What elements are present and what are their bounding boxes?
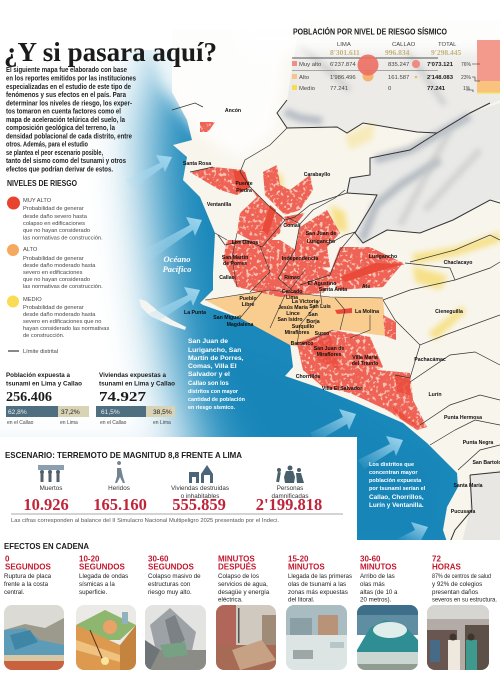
column: 0 seconds: central. (4, 589, 25, 596)
intro text: efectos que podrían derivar de estos. (6, 166, 113, 173)
stat: homes exposed to tsunami: 38,5% (153, 409, 172, 416)
map: district labels: del Triunfo (352, 361, 378, 367)
map: district labels: Ventanilla (207, 202, 231, 208)
row: medio (292, 85, 471, 92)
map: district labels: Cercado (282, 289, 302, 295)
legend: alto: que no hayan considerado (23, 277, 90, 283)
row: medio: 0 (388, 86, 392, 92)
label: Océano Pacífico: Pacífico (163, 264, 191, 274)
column: 10-20 seconds: sísmicas a la (79, 581, 115, 588)
stat: injured: 165.160 (93, 495, 147, 514)
legend: medio: desde daño moderado hasta (23, 312, 96, 318)
callout: districts with most population at risk: Callao son los (188, 381, 229, 387)
column: 72 hours: 87% de centros de salud (432, 573, 491, 580)
map: district labels: Independencia (282, 256, 318, 262)
stat: injured (93, 461, 147, 514)
map: district labels: San Isidro (277, 317, 303, 323)
stat: injured: Heridos (108, 485, 130, 492)
row: medio: 1% (463, 86, 471, 92)
map: district labels: Jesús María (278, 305, 308, 311)
map: district labels: Los Olivos (232, 240, 258, 246)
stat: people affected: damnificadas (271, 493, 309, 500)
map: land (172, 30, 500, 542)
intro text: composición geológica del terreno, la (6, 125, 115, 132)
map: district labels: Lima (286, 295, 298, 301)
intro text: tanto del sismo como del tsunami y otros (6, 158, 126, 165)
callout: districts most exposed to tsunami (369, 462, 426, 509)
column: 10-20 seconds: SEGUNDOS (79, 562, 125, 572)
callout: districts with most population at risk: cantidad de población (188, 397, 245, 403)
column: 30-60 seconds: riesgo muy alto. (148, 589, 192, 596)
map: district labels: Piedra (236, 188, 252, 194)
map: sea and coast (0, 0, 500, 542)
column: 15-20 minutes: olas de tsunami a las (288, 581, 346, 588)
callout: districts most exposed to tsunami: población expuesta (369, 478, 422, 484)
map: northern land fade (130, 0, 300, 160)
stacked bar (466, 40, 500, 94)
column: minutes after: eléctrica. (218, 596, 243, 604)
column: 30-60 minutes: 20 metros). (360, 596, 392, 604)
map: district labels: Rímac (284, 275, 300, 281)
callout: districts with most population at risk: Lurigancho, San (188, 347, 241, 354)
stat: homes exposed to tsunami: tsunami en Lima y Callao (99, 380, 175, 388)
column: 30-60 seconds: estructuras con (148, 581, 191, 588)
row: muy alto: 76% (461, 62, 472, 68)
legend: medio: MEDIO (23, 297, 42, 303)
column: 72 hours: 72 (432, 554, 441, 564)
legend: muy alto (7, 196, 103, 242)
intro text: en los reportes emitidos por las instituciones (6, 76, 136, 82)
map: district labels: San Juan de (306, 231, 336, 237)
callout: districts with most population at risk: Salvador y el (188, 371, 230, 378)
callout: districts most exposed to tsunami: Los distritos que (369, 462, 414, 468)
column: 10-20 seconds: superficie. (79, 589, 107, 596)
column: 30-60 seconds: SEGUNDOS (148, 562, 194, 572)
population table: 8'301.611 (330, 48, 360, 57)
column: 30-60 minutes: olas más (360, 581, 385, 588)
map: district labels: de Porres (223, 261, 247, 267)
legend: medio: Probabilidad de generar (23, 305, 84, 311)
intro text: determinar los niveles de riesgo, los exper- (6, 100, 133, 107)
map: district labels: El Agustino (308, 281, 336, 287)
column: 10-20 seconds: Llegada de ondas (79, 573, 128, 580)
column: minutes after: desagüe y energía (218, 589, 270, 596)
column: 72 hours: severos en su estructura. (432, 596, 497, 604)
column: 30-60 minutes: Arribo de las (360, 573, 395, 580)
legend: muy alto: Probabilidad de generar (23, 206, 84, 212)
map: district labels: Barranco (291, 341, 313, 347)
label: Océano Pacífico (163, 254, 191, 274)
stat: population exposed to tsunami: 62,8% (8, 409, 27, 416)
map: island San Lorenzo (139, 299, 186, 330)
image: plate rupture (4, 605, 64, 670)
map: district labels: San Juan de (314, 346, 344, 352)
column: 30-60 minutes: MINUTOS (360, 562, 397, 572)
stat: deaths: Muertos (40, 485, 62, 492)
row: alto: 1'986.496 (330, 75, 356, 81)
row: alto: 161.587 (388, 75, 409, 81)
map: district labels: Pueblo (239, 296, 257, 302)
legend: alto: las normativas de construcción. (23, 284, 103, 290)
stat: homes destroyed: Viviendas destruidas (171, 485, 229, 492)
row: alto: Alto (299, 75, 310, 81)
intro text: se plantea el peor escenario posible, (6, 150, 103, 157)
callout: districts most exposed to tsunami: concentran mayor (369, 470, 418, 476)
stat: population exposed to tsunami (6, 372, 89, 426)
row: muy alto: 6'237.874 (330, 62, 356, 68)
column: 30-60 seconds: 30-60 (148, 554, 169, 564)
heading: population by risk: POBLACIÓN POR NIVEL DE RIESGO SÍSMICO (293, 28, 447, 36)
map: very high risk zones (190, 122, 427, 430)
legend: alto: ALTO (23, 247, 38, 253)
column: 30-60 minutes: altas (de 10 a (360, 589, 398, 596)
map: district labels: Ancón (225, 108, 241, 114)
map: grey mountains (277, 20, 500, 542)
column: 10-20 seconds (79, 554, 128, 596)
legend: muy alto: colapso en edificaciones (23, 221, 85, 227)
heading: chain effects: EFECTOS EN CADENA (4, 541, 89, 551)
map: district labels: Carabayllo (304, 172, 330, 178)
callout: districts most exposed to tsunami: Lurín y Ventanilla. (369, 502, 424, 509)
column: minutes after (218, 554, 270, 604)
stat: homes exposed to tsunami: 61,5% (101, 409, 120, 416)
column: minutes after: MINUTOS (218, 554, 255, 564)
label: Océano Pacífico: Océano (164, 254, 190, 264)
callout: districts most exposed to tsunami: Callao, Chorrillos, (369, 494, 424, 501)
map: district labels: Santa Anita (319, 287, 347, 293)
map: top fade (240, 0, 500, 52)
image: seismic waves (76, 605, 136, 670)
column: 30-60 seconds: Colapso masivo de (148, 573, 201, 580)
stat: population exposed to tsunami: en Lima (60, 420, 78, 426)
intro text: tos tomaron en cuenta factores como el (6, 108, 121, 116)
column: minutes after: DESPUÉS (218, 562, 257, 572)
stat: homes exposed to tsunami: Viviendas expuestas a (99, 372, 166, 379)
map: district labels: La Victoria (292, 299, 318, 305)
column: 30-60 minutes: 30-60 (360, 554, 381, 564)
callout: districts with most population at risk: en riesgo sísmico. (188, 405, 236, 411)
column: 0 seconds: frente a la costa (4, 581, 49, 588)
legend: muy alto: MUY ALTO (23, 198, 52, 204)
stat: homes destroyed: 555.859 (172, 495, 226, 514)
stat: homes destroyed: o inhabitables (181, 493, 219, 500)
row: alto: 23% (461, 75, 472, 81)
legend: muy alto: que no hayan considerado (23, 228, 90, 234)
row: muy alto: Muy alto (299, 62, 322, 68)
legend: alto: Probabilidad de generar (23, 256, 84, 262)
stat: homes exposed to tsunami: en Lima (153, 420, 171, 426)
intro text: mapa de aceleración telúrica del suelo, la (6, 117, 125, 124)
column: 15-20 minutes: del litoral. (288, 596, 315, 604)
map: district labels: La Punta (184, 310, 206, 316)
legend: medio: severo en edificaciones que no (23, 319, 101, 325)
map: district labels: Punta Hermosa (444, 415, 482, 421)
stat: people affected (256, 466, 322, 514)
map: district labels: Cieneguilla (435, 309, 463, 315)
callout: districts with most population at risk: distritos con mayor (188, 389, 239, 395)
stat: deaths: 10.926 (23, 495, 69, 514)
legend: muy alto: las normativas de construcción. (23, 236, 103, 242)
map: district labels: Magdalena (227, 322, 254, 328)
map: district labels: Villa El Salvador (322, 386, 362, 392)
row: medio: 77.241 (427, 86, 446, 92)
map: district labels: Chorrillos (296, 374, 320, 380)
legend: medio: hayan considerado las normativas (23, 326, 109, 332)
column: 72 hours: presentan daños (432, 589, 478, 596)
legend: muy alto: desde daño severo hasta (23, 214, 88, 220)
map: district boundaries (172, 100, 500, 542)
intro text: otros. Además, para el estudio (6, 142, 88, 148)
map: district labels: Ate (362, 284, 370, 290)
column: 72 hours (432, 554, 497, 604)
map: district labels (183, 108, 500, 515)
column: 15-20 minutes: MINUTOS (288, 562, 325, 572)
stat: population exposed to tsunami: Población expuesta a (6, 372, 70, 379)
map: district labels: Borja (306, 319, 320, 325)
stat: homes exposed to tsunami: 74.927 (99, 389, 146, 404)
population table: LIMA (337, 42, 351, 48)
column: 0 seconds: Ruptura de placa (4, 573, 52, 580)
legend: district limit: Límite distrital (23, 349, 58, 355)
column: 10-20 seconds: 10-20 (79, 554, 100, 564)
panel: earthquake scenario (0, 437, 357, 542)
column: 72 hours: y 92% de colegios (432, 581, 482, 588)
callout: districts with most population at risk (188, 338, 245, 411)
map: district labels: Santa María (453, 483, 483, 489)
row: medio: Medio (299, 86, 316, 92)
map: district labels: Miraflores (285, 330, 310, 336)
intro text: densidad poblacional de cada distrito, entre (6, 133, 132, 140)
intro text: fenómenos y sus efectos en el país. Para (6, 92, 126, 99)
image: damaged services (216, 605, 276, 670)
column: 30-60 minutes (360, 554, 398, 604)
stat: population exposed to tsunami: tsunami en Lima y Callao (6, 380, 82, 388)
map: district labels: Punta Negra (463, 440, 493, 446)
row: muy alto: 835.247 (388, 62, 409, 68)
white footer background (0, 540, 500, 679)
map: district labels: Surquillo (292, 324, 314, 330)
column: minutes after: Colapso de los (218, 573, 259, 580)
column: 0 seconds: 0 (5, 554, 10, 564)
map: district labels: San Martín (222, 255, 248, 261)
map: district labels: Miraflores (317, 352, 342, 358)
map: district labels: Puente (235, 181, 253, 187)
column: minutes after: servicios de agua, (218, 581, 268, 588)
population table: CALLAO (392, 42, 416, 48)
legend: medio: de construcción. (23, 333, 65, 339)
map: district labels: Santa Rosa (183, 161, 211, 167)
map: district labels: Chaclacayo (444, 260, 472, 266)
population table: 996.834 (385, 48, 410, 57)
map: district labels: Lurigancho (369, 254, 397, 260)
legend: alto (7, 244, 103, 290)
arrows: tsunami direction (125, 155, 428, 540)
column: 15-20 minutes: 15-20 (288, 554, 309, 564)
row: alto (292, 74, 472, 81)
map: district labels: Lince (286, 311, 300, 317)
legend: risk levels (7, 196, 109, 355)
map: district labels: San Luis (309, 304, 331, 310)
heading: niveles de riesgo: NIVELES DE RIESGO (7, 179, 77, 188)
column: 15-20 minutes (288, 554, 352, 604)
map: medium risk zones (272, 122, 500, 340)
image: collapsed buildings (145, 605, 206, 670)
map: district labels: San (308, 312, 318, 318)
map: district labels: Libre (242, 302, 254, 308)
map: district labels: Lurigancho (307, 239, 335, 245)
stat: homes destroyed (171, 465, 229, 514)
row: muy alto (292, 61, 472, 68)
map: high risk zone (205, 290, 386, 350)
stat: population exposed to tsunami: 256.406 (6, 389, 52, 404)
stat: homes exposed to tsunami: en el Callao (100, 420, 127, 426)
map: district labels: Callao (219, 275, 235, 281)
intro text: El siguiente mapa fue elaborado con base (6, 67, 127, 74)
heading: scenario: ESCENARIO: TERREMOTO DE MAGNITUD 8,8 FRENTE A LIMA (5, 450, 242, 460)
column: 15-20 minutes: Llegada de las primeras (288, 573, 352, 580)
column: 72 hours: HORAS (432, 562, 462, 572)
stat: people affected: Personas (277, 485, 303, 492)
map: district labels: San Miguel (213, 315, 241, 321)
image: tsunami wave (357, 605, 418, 670)
legend: alto: severo en edificaciones (23, 270, 83, 276)
legend: medio (7, 296, 109, 339)
map: district labels: Comas (283, 223, 301, 229)
row: alto: 2'148.083 (427, 75, 454, 81)
population table (292, 28, 500, 94)
title: ¿Y si pasara aquí? (4, 37, 217, 67)
stat: population exposed to tsunami: en el Callao (7, 420, 34, 426)
map: district labels: Pachacámac (414, 357, 446, 363)
column: 0 seconds (4, 554, 52, 596)
callout: districts with most population at risk: Comas, Villa El (188, 363, 237, 370)
map: district labels: Lurín (429, 392, 441, 398)
stat: people affected: 2'199.818 (256, 495, 322, 514)
callout: districts with most population at risk: Martín de Porres, (188, 355, 244, 362)
map: district labels: Pucusana (451, 509, 475, 515)
callout: districts with most population at risk: San Juan de (188, 338, 228, 345)
image: damage after 72 hours (427, 605, 489, 670)
column: 30-60 seconds (148, 554, 201, 596)
map: district labels: Villa María (352, 355, 378, 361)
row: muy alto: 7'073.121 (427, 62, 454, 68)
map: district labels: La Molina (355, 309, 379, 315)
stat: deaths (23, 465, 69, 514)
footnote: Las cifras corresponden al balance del II Simulacro Nacional Multipeligro 2025 presentado por el Indeci. (11, 518, 279, 524)
stat: population exposed to tsunami: 37,2% (61, 409, 80, 416)
population table: TOTAL (438, 42, 457, 48)
stat: homes exposed to tsunami (96, 372, 175, 426)
intro text: especializadas en el estudio de este tipo de (6, 84, 131, 91)
population table: 9'298.445 (431, 48, 461, 57)
column: 0 seconds: SEGUNDOS (5, 562, 51, 572)
callout: districts most exposed to tsunami: por tsunami serían el (369, 486, 426, 492)
legend: alto: desde daño moderado hasta (23, 263, 96, 269)
bubbles (358, 54, 420, 82)
row: medio: 77.241 (330, 86, 348, 92)
intro text (6, 67, 136, 173)
map: district labels: Surco (315, 331, 329, 337)
column: 15-20 minutes: zonas más expuestas (288, 589, 348, 596)
image: first tsunami waves (286, 605, 347, 670)
